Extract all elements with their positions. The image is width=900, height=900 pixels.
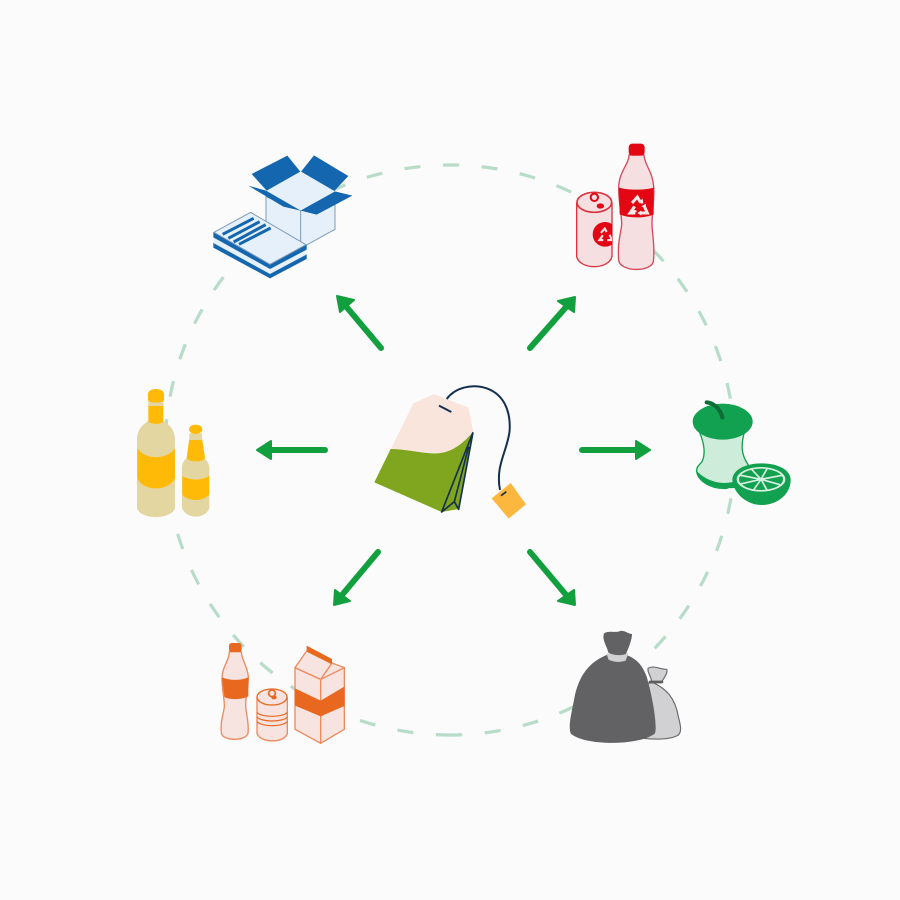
can top [257, 689, 287, 705]
large bottle neck band [148, 401, 163, 406]
icon: tea bag [374, 386, 526, 519]
lime flesh [739, 469, 783, 490]
large bottle cap [148, 389, 164, 402]
lower paper stack [213, 243, 307, 278]
string [447, 386, 510, 490]
small bottle neck [187, 438, 205, 461]
plastic bottle label [222, 677, 248, 699]
large bottle label [137, 448, 175, 488]
top paper sheet [214, 212, 306, 264]
lime rind [732, 463, 791, 505]
dashed cycle ring [165, 165, 735, 735]
bottle recycling symbol [630, 197, 647, 216]
can pull hole [597, 203, 604, 209]
can ring pull [269, 690, 275, 697]
small bag body [643, 683, 681, 739]
carton right face [321, 668, 344, 743]
can ribs [257, 712, 287, 726]
arrow: to general waste [530, 552, 575, 605]
can pull tab [271, 695, 277, 699]
icon: red can and plastic bottle [577, 144, 654, 269]
box body [266, 193, 335, 248]
icon: apple core and lime [693, 402, 791, 505]
plastic bottle body [221, 652, 248, 739]
can ring pull [591, 194, 598, 201]
ring right half [448, 165, 735, 735]
recycling arrow right [641, 206, 647, 213]
box inside [266, 172, 335, 211]
arrow: to mixed packaging [334, 552, 378, 605]
large bag tie [607, 653, 628, 662]
can recycling symbol [599, 229, 612, 240]
tea bag slot [439, 406, 451, 412]
carton left face [295, 668, 321, 743]
apple core flesh [697, 433, 748, 488]
second sheet [214, 237, 306, 274]
can top [577, 192, 612, 212]
upper paper edge [213, 232, 307, 269]
bottle label [619, 188, 654, 217]
tea bag paper top [391, 394, 473, 453]
arrow: to plastic and cans [530, 297, 575, 348]
small bag top [648, 667, 667, 682]
box centre edge [299, 210, 302, 248]
large bag body [570, 655, 656, 743]
can recycling badge [593, 222, 612, 247]
lime segment lines [739, 468, 782, 491]
recycling arrow top [632, 197, 640, 203]
icon: cardboard box and paper [213, 155, 352, 278]
can symbol arrows [599, 229, 612, 240]
icon: rubbish bags [570, 631, 681, 743]
carton band [295, 687, 344, 716]
can body [257, 698, 287, 741]
tea bag fold lines [442, 432, 473, 512]
ring left half [165, 165, 451, 735]
paper text lines [223, 218, 271, 244]
recycling arrow left [630, 206, 635, 213]
small bottle cap [189, 425, 202, 434]
apple stem [707, 402, 722, 417]
lime cut face [737, 467, 785, 492]
arrow: to glass [257, 441, 325, 459]
tag slot [501, 492, 506, 496]
box flaps [248, 155, 352, 215]
infographic: tea bag waste streams [137, 144, 791, 744]
arrow: to food waste [582, 441, 650, 459]
can body [577, 203, 612, 267]
recycling arrow heads [632, 198, 646, 216]
carton gable [295, 651, 344, 679]
carton top seal [307, 646, 332, 664]
icon: orange bottle, can and carton [221, 643, 344, 743]
plastic bottle cap [229, 643, 242, 652]
tag [492, 483, 526, 519]
small bottle body [182, 457, 209, 517]
bottle body [618, 155, 654, 269]
apple core base shadow [696, 470, 738, 488]
arrow: to paper and cardboard [337, 296, 381, 348]
small bottle label [182, 476, 209, 500]
bottle cap [629, 144, 645, 156]
apple top [693, 404, 753, 440]
tea bag green body [374, 432, 473, 512]
large bottle neck [148, 404, 163, 424]
small bag tie [650, 678, 662, 686]
icon: glass bottles [137, 389, 209, 517]
small bottle neck band [189, 433, 202, 440]
large bottle body [137, 421, 175, 517]
large bag top [603, 631, 632, 655]
